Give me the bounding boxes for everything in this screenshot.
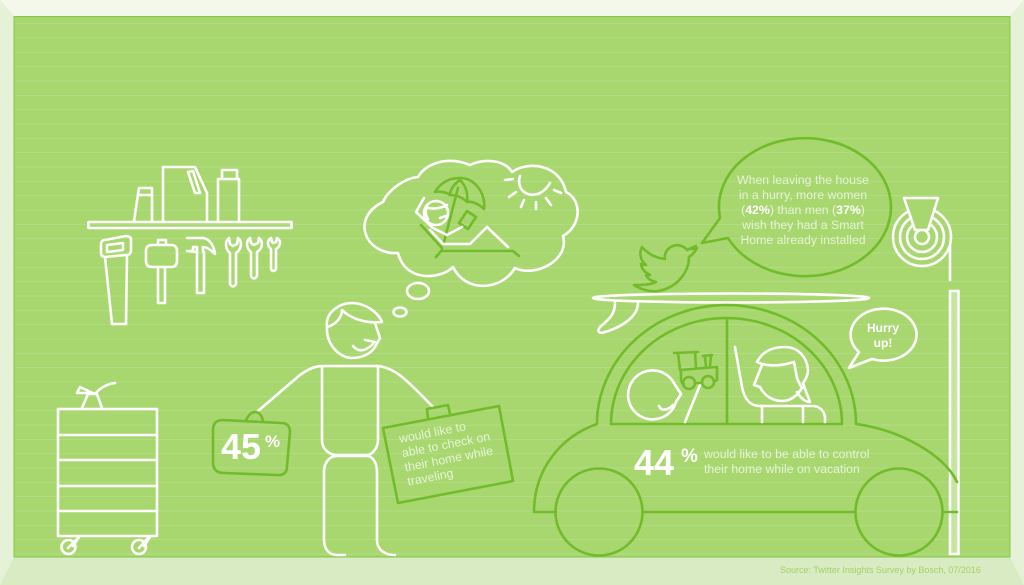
text: would like to check: able to check on [401, 429, 491, 460]
icon: speech bubble, women and men [702, 138, 891, 276]
stat: 44% vacation: would like to be able to control [703, 447, 869, 461]
shelf board [88, 222, 292, 228]
person on lounger [416, 198, 508, 247]
child passenger [628, 370, 700, 422]
icon: umbrella, tablet and lounger [421, 178, 519, 257]
stat: 44% vacation: 44 [634, 442, 674, 483]
text: would like to check: their home while [403, 444, 494, 474]
bubble text: When leaving the house [737, 173, 869, 187]
driver [735, 347, 825, 422]
text: would like to check: traveling [406, 466, 455, 489]
icon: speech bubble, women and men: wish they had a Smart [741, 218, 864, 232]
icon: man with suitcases [213, 303, 513, 555]
bottles on shelf [134, 167, 239, 221]
icon: speech bubble, women and men: (42%) than men (37%) [741, 203, 865, 217]
icon: toy train [674, 352, 717, 384]
icon: sun [505, 176, 561, 209]
icon: saw [101, 236, 131, 324]
icon: speech bubble, women and men: Home already installed [740, 233, 866, 247]
text: would like to check: would like to [397, 419, 467, 446]
car window [611, 318, 842, 424]
stat: 45%: 45 [221, 426, 261, 467]
icon: wrenches [226, 238, 280, 286]
bubble outline [702, 138, 891, 276]
car body [534, 305, 957, 512]
icon: speech bubble, women and men: in a hurry, more women [739, 188, 867, 202]
icon: car [534, 305, 957, 556]
icon: twitter bird [634, 245, 697, 291]
text: would like to check [397, 415, 497, 489]
icon: mallet [146, 240, 177, 303]
callout: hurry up: up! [874, 336, 892, 350]
thought bubbles [407, 283, 429, 299]
icon: hammer [187, 238, 215, 293]
stat: 44% vacation: their home while on vacation [704, 462, 860, 476]
icon: man with suitcases: % [265, 432, 280, 451]
head [327, 303, 382, 358]
icon: surfboard [593, 294, 869, 333]
callout: hurry up [849, 309, 917, 368]
icon: pole and hose reel [893, 198, 958, 554]
body and arms [258, 366, 433, 555]
icon: thought cloud [365, 161, 578, 316]
source note: Source: Twitter Insights Survey by Bosch, 07/2016 [780, 565, 981, 575]
icon: tool cart [58, 383, 157, 554]
cloud outline [365, 161, 578, 286]
callout: hurry up: Hurry [867, 321, 899, 335]
right suitcase [383, 405, 513, 503]
stat: 44% vacation: % [681, 446, 698, 467]
stat: 44% vacation [634, 442, 869, 483]
icon: shelf with tools [88, 167, 292, 324]
wheels [556, 468, 642, 556]
left suitcase [213, 412, 290, 475]
